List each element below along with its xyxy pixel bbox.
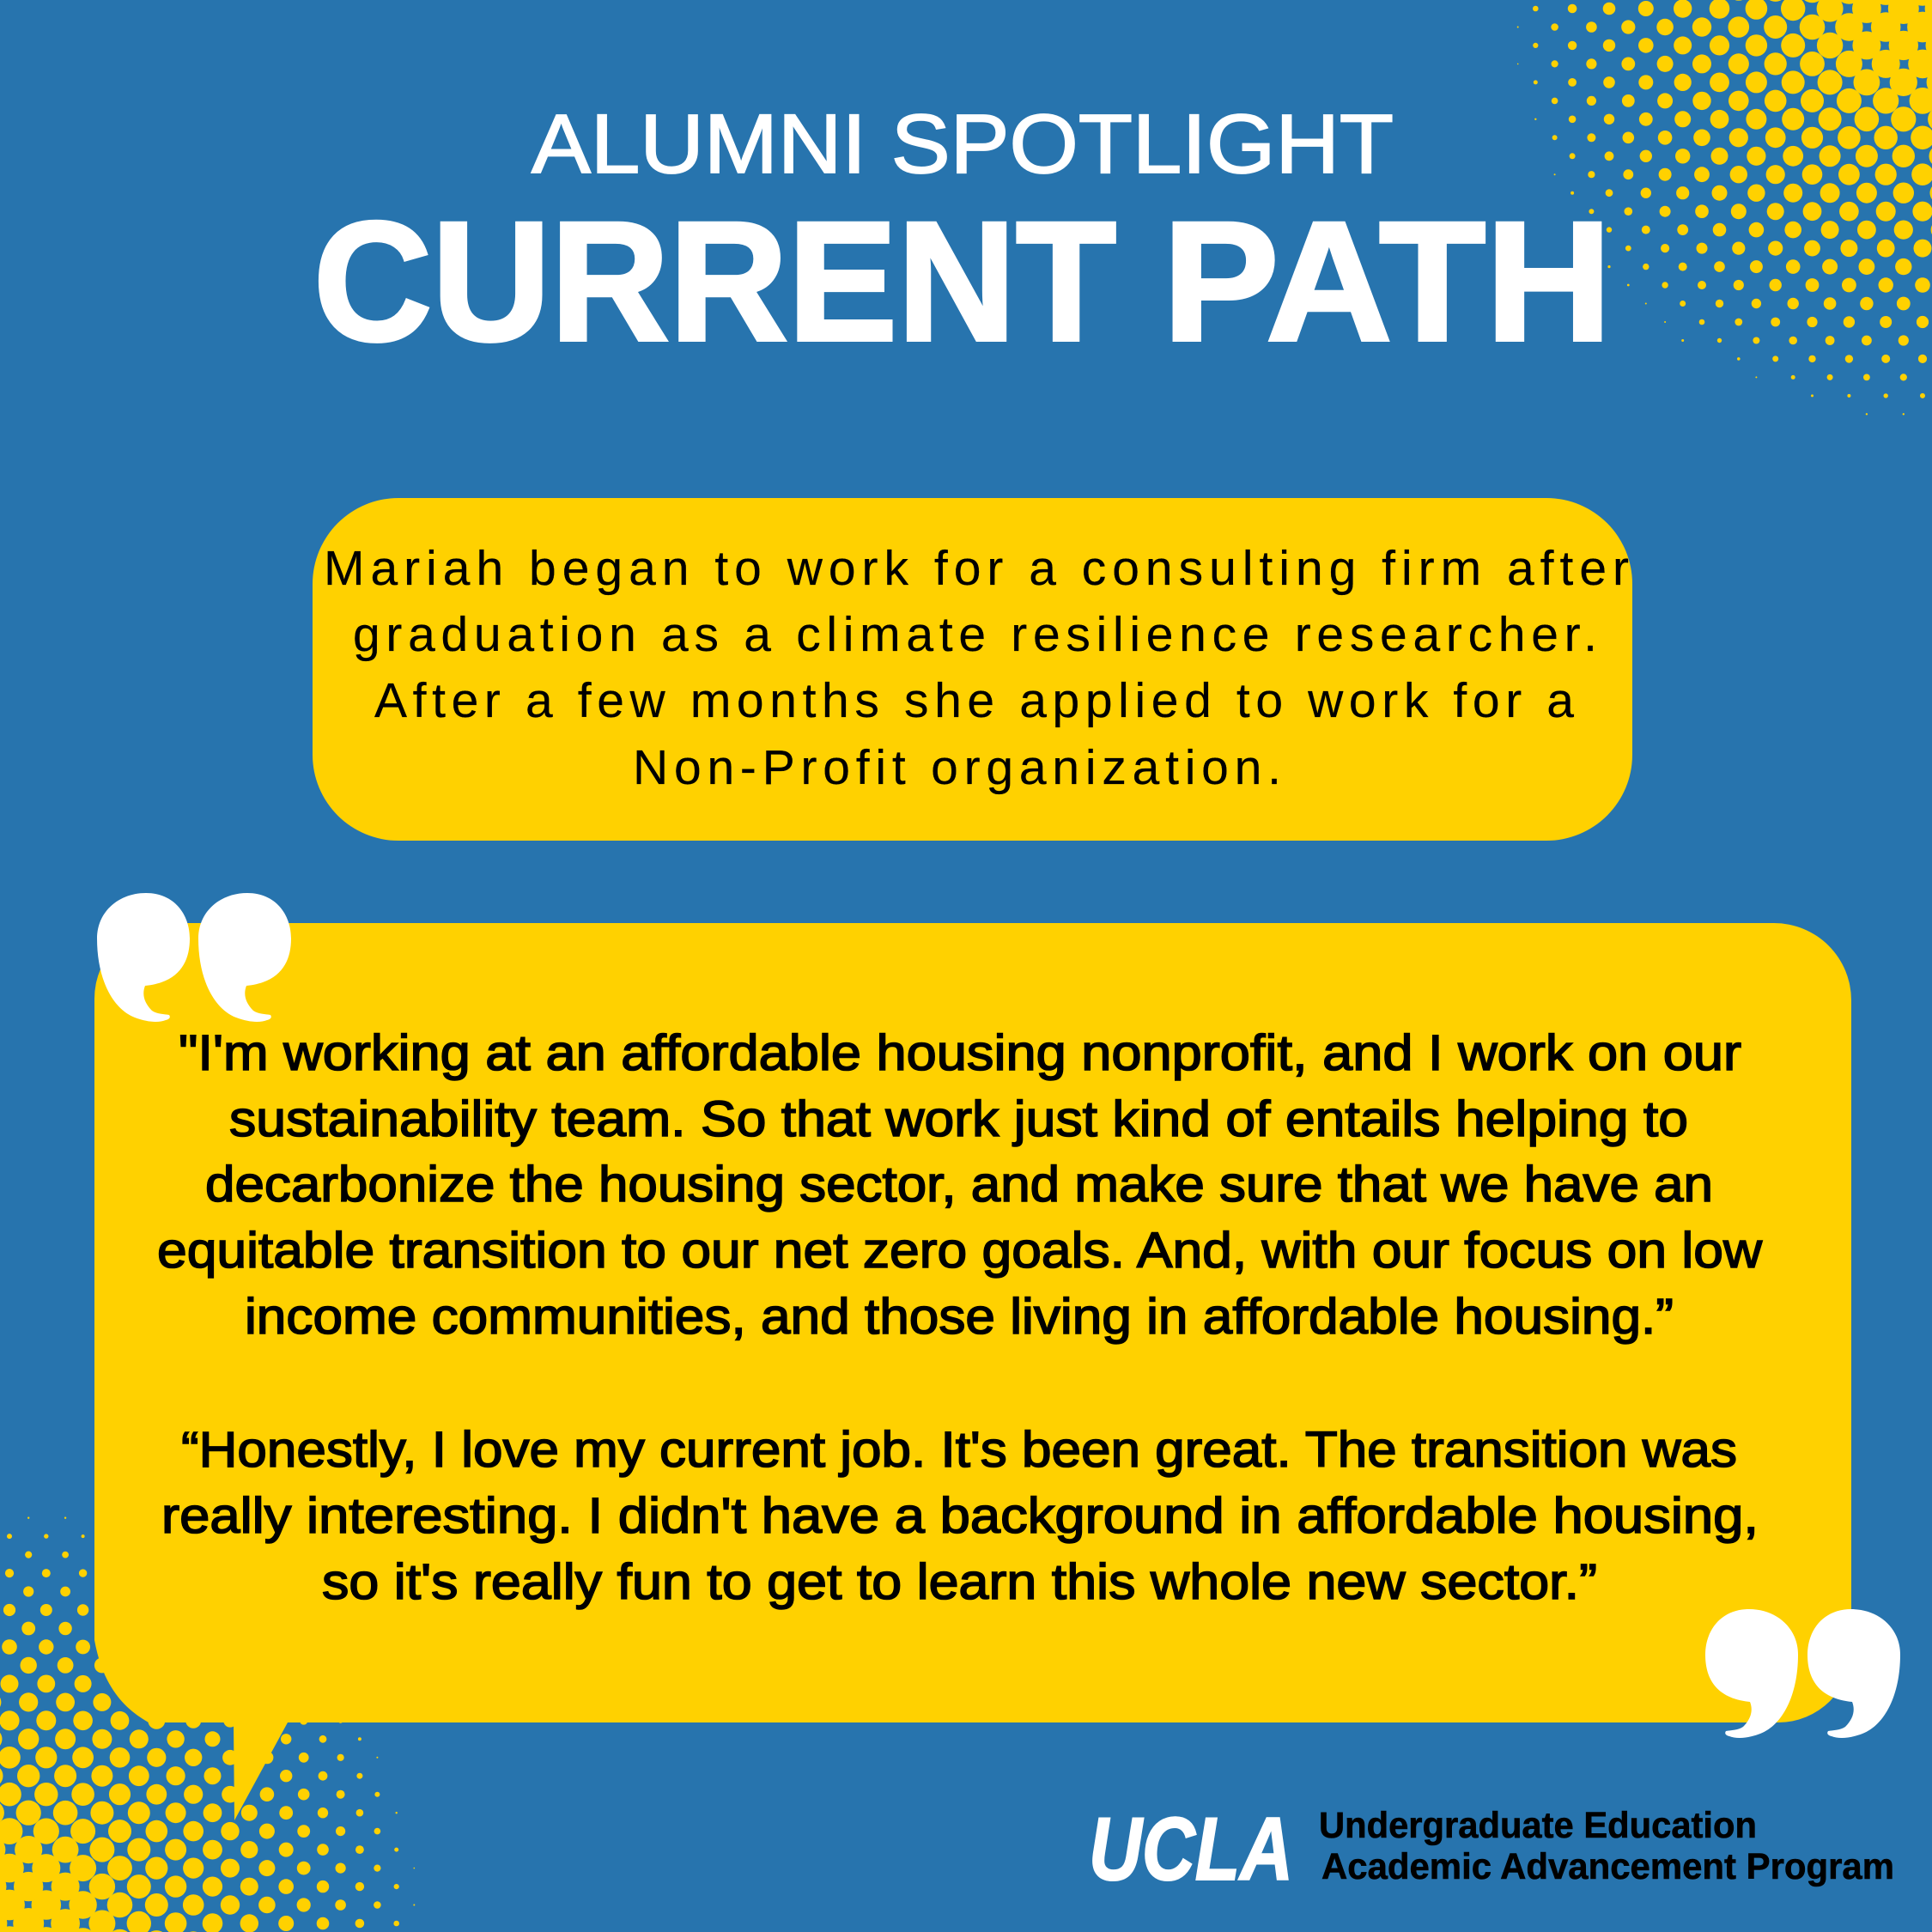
logo wordmark: UCLA: UCLA (1089, 1800, 1293, 1899)
panel: career summary (313, 498, 1632, 841)
heading: current path: PATH (1163, 186, 1612, 376)
text block: first quote: equitable transition to our net zero goals. And, with our focus on low (157, 1223, 1763, 1279)
text block: first quote: income communities, and those living in affordable housing.” (245, 1289, 1674, 1345)
heading: alumni spotlight: ALUMNI SPOTLIGHT (532, 97, 1394, 191)
logo: UCLA wordmark and program name (1089, 1800, 1894, 1899)
text block: second quote: really interesting. I didn't have a background in affordable housing, (161, 1488, 1759, 1544)
text block: first quote: decarbonize the housing sector, and make sure that we have an (205, 1157, 1713, 1212)
text block: career summary: graduation as a climate resilience researcher. (353, 607, 1597, 662)
panel: quote speech bubble (94, 923, 1851, 1820)
logo text: program: Academic Advancement Program (1321, 1846, 1894, 1887)
text block: second quote: “Honestly, I love my current job. It's been great. The transition was (181, 1422, 1737, 1478)
text block: career summary: Mariah began to work for a consulting firm after (324, 541, 1629, 596)
heading: current path (313, 186, 1612, 376)
heading: current path: CURRENT (313, 186, 1116, 376)
title block (313, 97, 1612, 376)
text block: first quote: "I'm working at an affordable housing nonprofit, and I work on our (179, 1025, 1741, 1081)
halftone dots: bottom left corner (0, 1516, 415, 1932)
halftone dots: top right corner (1517, 0, 1932, 415)
text block: career summary (324, 541, 1629, 795)
text block: first quote: sustainability team. So that work just kind of entails helping to (229, 1091, 1688, 1147)
icon: opening quotation marks (97, 893, 291, 1022)
text block: career summary: After a few months she applied to work for a (374, 673, 1574, 728)
text block: second quote (161, 1422, 1759, 1610)
text block: career summary: Non-Profit organization. (633, 740, 1281, 795)
text block: second quote: so it's really fun to get to learn this whole new sector.” (322, 1554, 1597, 1610)
text block: first quote (157, 1025, 1763, 1345)
logo text: department: Undergraduate Education (1319, 1805, 1757, 1846)
icon: closing quotation marks (1705, 1609, 1900, 1738)
